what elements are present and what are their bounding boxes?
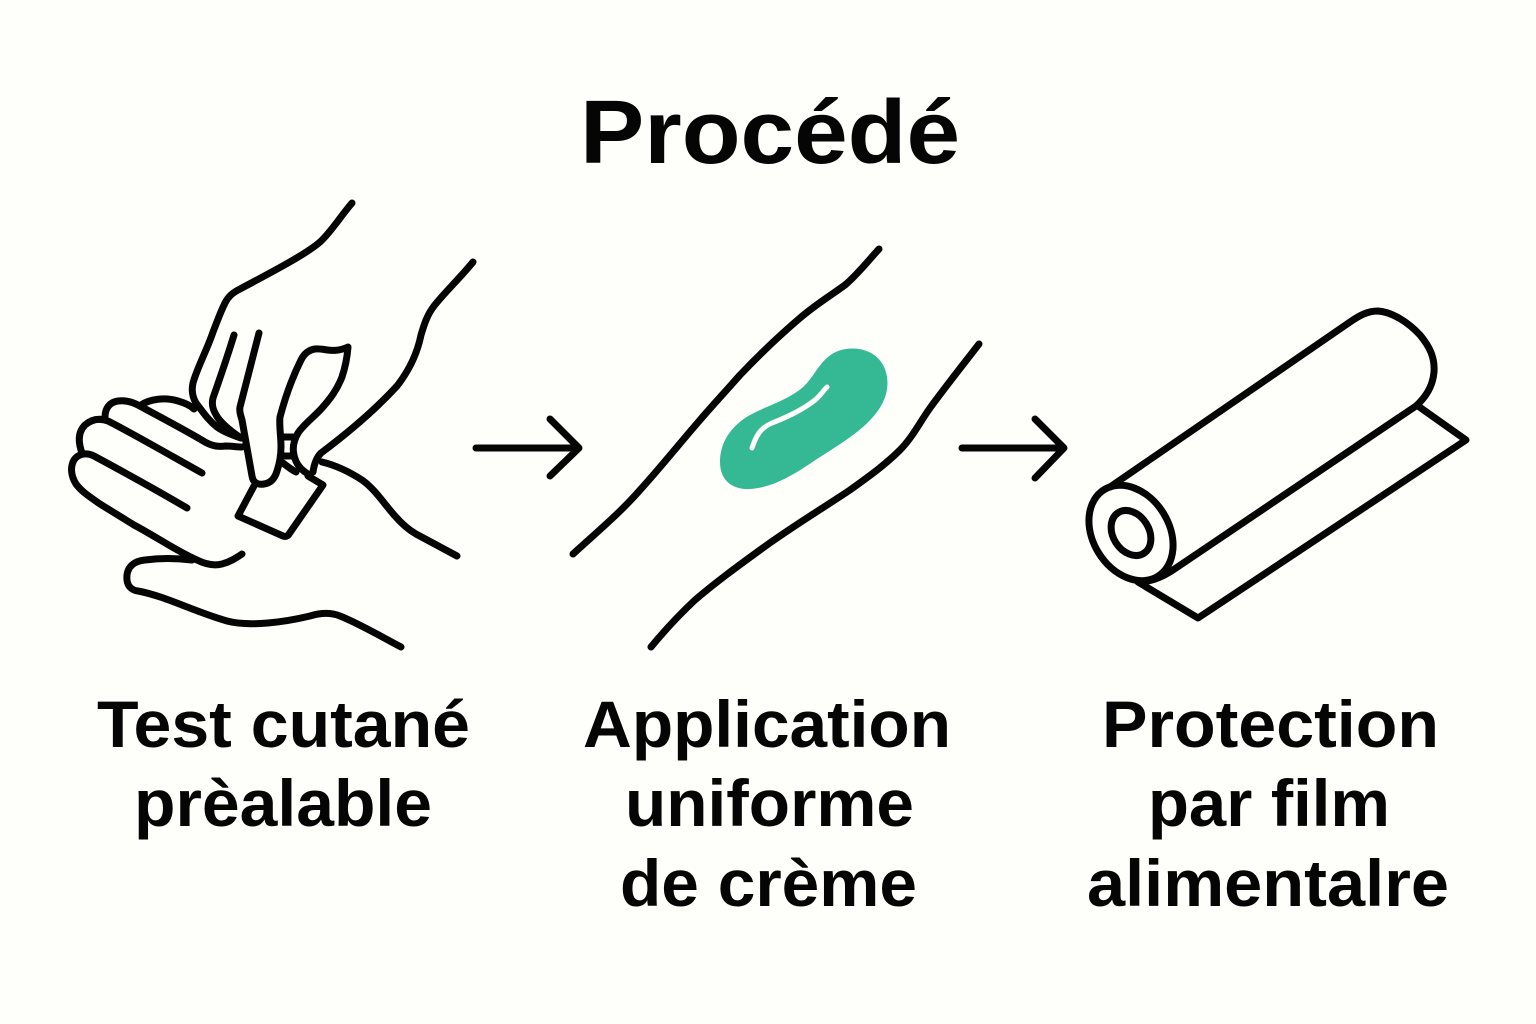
icon: cream on arm bbox=[573, 249, 979, 647]
label: step 3 bbox=[1087, 687, 1449, 920]
cream highlight bbox=[752, 387, 827, 448]
label: step 2: uniforme bbox=[625, 766, 914, 840]
arm lines bbox=[573, 249, 979, 647]
label: step 3: Protection bbox=[1102, 687, 1439, 761]
title: Procédé bbox=[580, 83, 960, 183]
icon: hands applying test patch bbox=[72, 203, 473, 647]
label: step 2: de crème bbox=[620, 846, 917, 920]
icon: roll of cling film bbox=[1072, 311, 1466, 618]
label: step 1: prèalable bbox=[134, 766, 432, 840]
label: step 1 bbox=[97, 687, 470, 840]
arrow 1 bbox=[476, 419, 579, 476]
label: step 2 bbox=[583, 687, 951, 920]
cream blob bbox=[720, 349, 887, 489]
label: step 3: par film bbox=[1148, 766, 1390, 840]
arrow 2 bbox=[962, 419, 1064, 478]
label: step 3: alimentalre bbox=[1087, 846, 1449, 920]
label: step 1: Test cutané bbox=[97, 687, 470, 761]
label: step 2: Application bbox=[583, 687, 951, 761]
